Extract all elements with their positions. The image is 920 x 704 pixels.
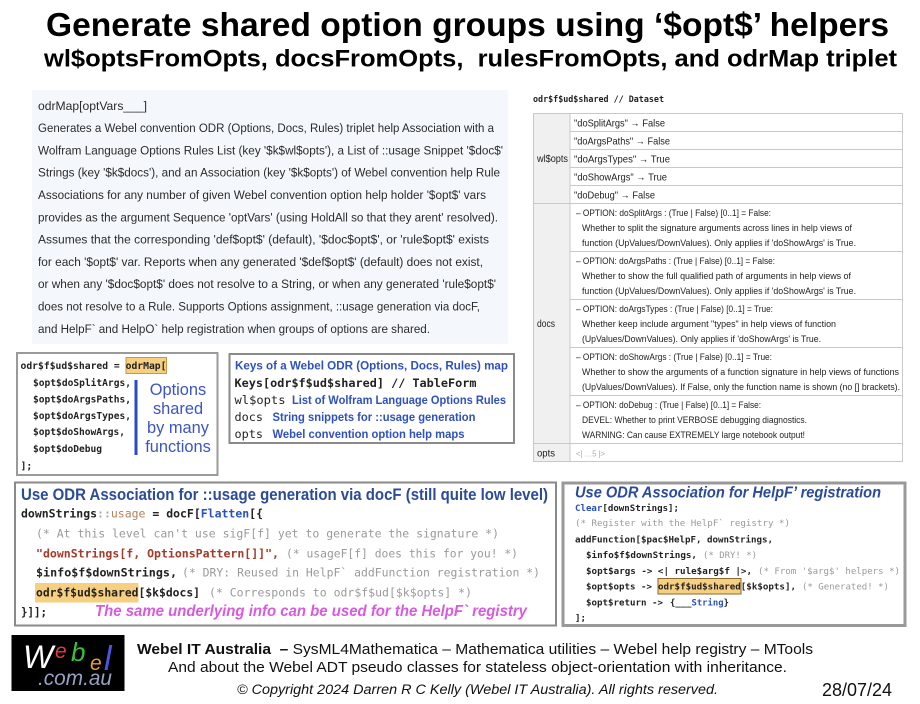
- wl$opts rows: "doArgsTypes" → True: [574, 154, 670, 166]
- code: (* DRY: Reused in HelpF` addFunction registration *): [182, 566, 540, 580]
- docs rows: – OPTION: doDebug : (True | False) [0..1] = False:: [576, 399, 761, 410]
- panel: keys of ODR map: Keys of a Webel ODR (Options, Docs, Rules) map: [235, 358, 508, 372]
- wl$opts rows: "doArgsPaths" → False: [574, 136, 670, 148]
- docs rows: Whether to split the signature arguments across lines in help views of: [582, 222, 852, 233]
- panel: keys of ODR map: docs: [234, 410, 263, 424]
- logo: Webel: e: [55, 640, 67, 663]
- docs rows: function (UpValues/DownValues). Only applies if 'doShowArgs' is True.: [582, 285, 856, 296]
- footer text: © Copyright 2024 Darren R C Kelly (Webel IT Australia). All rights reserved.: [237, 682, 718, 697]
- callout: options shared: functions: [145, 438, 211, 456]
- heading: Use ODR Association for ::usage generation via docF (still quite low level): [21, 485, 548, 504]
- row labels: wl$opts: [536, 154, 568, 165]
- docs rows: (UpValues/DownValues). Only applies if 'doShowArgs' is True.: [582, 333, 821, 344]
- panel: odrMap code: $opt$doArgsPaths,: [33, 394, 131, 406]
- code: (* Register with the HelpF` registry *): [575, 518, 790, 529]
- panel: odrMap description: provides as the argument Sequence 'optVars' (using HoldAll so that they arent' resolved).: [38, 210, 498, 224]
- code: (* At this level can't use sigF[f] yet to generate the signature *): [36, 526, 499, 540]
- logo: Webel: W: [23, 639, 56, 675]
- highlight: shared: [658, 578, 741, 594]
- code: $info$f$downStrings,: [586, 550, 697, 561]
- footer text: [137, 642, 813, 697]
- code: Clear[downStrings];: [575, 503, 679, 514]
- highlight: odrMap: [126, 358, 166, 374]
- docs rows: – OPTION: doArgsTypes : (True | False) [0..1] = True:: [576, 303, 773, 314]
- code: {___String}: [670, 598, 729, 608]
- docs rows: function (UpValues/DownValues). Only applies if 'doShowArgs' is True.: [582, 237, 856, 248]
- code: downStrings::usage = docF[Flatten[{: [21, 506, 263, 520]
- panel: odrMap description: Associations for any number of given Webel convention option help holder '$opt$' vars: [38, 188, 486, 202]
- docs rows: [576, 207, 900, 440]
- logo: Webel: l: [104, 640, 113, 678]
- docs rows: Whether to show the full qualified path of arguments in help views of: [582, 270, 851, 281]
- opts row: <| …5 |>: [576, 448, 605, 458]
- subtitle: wl$optsFromOpts, docsFromOpts, rulesFromOpts, and odrMap triplet: [43, 46, 897, 72]
- callout: same info: The same underlying info can be used for the HelpF` registry: [95, 603, 528, 620]
- code: [575, 503, 900, 624]
- dataset heading: odr$f$ud$shared // Dataset: [533, 94, 664, 104]
- code: odr$f$ud$shared[$k$opts],: [658, 582, 796, 592]
- code: $opt$args -> <| rule$arg$f |>,: [586, 566, 752, 577]
- callout: options shared: shared: [153, 400, 203, 418]
- footer text: Webel IT Australia – SysML4Mathematica – Mathematica utilities – Webel help registry – MTools: [137, 642, 813, 658]
- code: addFunction[$pac$HelpF, downStrings,: [575, 534, 773, 546]
- code: (* usageF[f] does this for you! *): [286, 546, 518, 560]
- docs rows: – OPTION: doShowArgs : (True | False) [0..1] = True:: [576, 351, 772, 362]
- wl$opts rows: "doShowArgs" → True: [574, 172, 667, 184]
- highlight: shared: [35, 583, 138, 602]
- panel: keys of ODR map: wl$opts: [234, 393, 286, 407]
- docs rows: Whether to show the arguments of a function signature in help views of functions: [582, 366, 899, 377]
- code: [21, 506, 540, 619]
- panel: odrMap description: for each '$opt$' var. Reports when any generated '$def$opt$' (default) does not exist,: [38, 255, 483, 269]
- panel: odrMap code: $opt$doDebug: [33, 444, 102, 455]
- panel: odrMap description: Strings (key '$k$docs'), and an Association (key '$k$opts') of Webel convention help Rule: [38, 166, 500, 180]
- code: ];: [575, 613, 586, 624]
- row labels: opts: [537, 448, 555, 460]
- code: (* From '$arg$' helpers *): [758, 566, 900, 577]
- panel: odrMap description: Wolfram Language Options Rules List (key '$k$wl$opts'), a List of ::usage Snippet '$doc$': [38, 143, 503, 157]
- code: (* Corresponds to odr$f$ud[$k$opts] *): [209, 586, 472, 600]
- docs rows: DEVEL: Whether to print VERBOSE debugging diagnostics.: [582, 414, 807, 425]
- logo: Webel: [12, 635, 124, 691]
- panel: odrMap description: Assumes that the corresponding 'def$opt$' (default), '$doc$opt$', or 'rule$opt$' exists: [38, 233, 489, 247]
- logo: Webel: b: [71, 637, 85, 667]
- docs rows: – OPTION: doSplitArgs : (True | False) [0..1] = False:: [576, 207, 771, 218]
- panel: dataset table: [534, 114, 902, 462]
- panel: keys of ODR map: String snippets for ::usage generation: [272, 410, 476, 424]
- code: (* DRY! *): [703, 550, 757, 561]
- wl$opts rows: "doDebug" → False: [574, 190, 655, 202]
- docs rows: (UpValues/DownValues). If False, only the function name is shown (no [] brackets).: [582, 381, 900, 392]
- callout: options shared: by many: [147, 419, 210, 437]
- title: Generate shared option groups using ‘$opt$’ helpers: [46, 6, 889, 43]
- wl$opts rows: "doSplitArgs" → False: [574, 118, 665, 130]
- panel: keys of ODR map: opts: [234, 427, 263, 441]
- panel: keys of ODR map: [230, 354, 514, 443]
- docs rows: – OPTION: doArgsPaths : (True | False) [0..1] = False:: [576, 255, 775, 266]
- panel: odrMap code: [17, 353, 218, 475]
- code: "downStrings[f, OptionsPattern[]]",: [36, 546, 279, 560]
- logo: Webel: .com.au: [38, 667, 112, 690]
- footer text: And about the Webel ADT pseudo classes for stateless object-orientation with inheritance.: [168, 659, 787, 676]
- code: odr$f$ud$shared[$k$docs]: [36, 586, 200, 600]
- docs rows: WARNING: Can cause EXTREMELY large notebook output!: [582, 429, 805, 440]
- docs rows: Whether keep include argument "types" in help views of function: [582, 318, 836, 329]
- panel: odrMap code: $opt$doArgsTypes,: [33, 411, 131, 422]
- panel: usage generation via docF: [15, 482, 556, 626]
- panel: odrMap description: or when any '$doc$opt$' does not resolve to a String, or when any generated 'rule$opt$': [38, 277, 496, 291]
- row labels: [536, 154, 568, 460]
- panel: HelpF registration: [563, 483, 905, 626]
- logo: Webel: e: [90, 652, 102, 675]
- panel: odrMap code: $opt$doSplitArgs,: [33, 377, 131, 389]
- code: }]];: [21, 605, 47, 619]
- row labels: docs: [537, 319, 555, 330]
- panel: odrMap code: ];: [20, 461, 32, 472]
- callout: options shared: Options: [150, 381, 206, 399]
- blue bar: [134, 380, 138, 455]
- callout: options shared: [145, 381, 211, 456]
- code: $opt$opts ->: [586, 582, 652, 592]
- code: $info$f$downStrings,: [36, 566, 177, 580]
- panel: odrMap description: odrMap[optVars___]: [38, 99, 147, 113]
- panel: odrMap description: [32, 90, 508, 344]
- panel: odrMap description: does not resolve to a Rule. Supports Options assignment, ::usage generation via docF,: [38, 300, 480, 314]
- code: (* Generated! *): [802, 582, 889, 592]
- panel: odrMap code: $opt$doShowArgs,: [33, 427, 125, 438]
- panel: keys of ODR map: List of Wolfram Language Options Rules: [292, 393, 506, 407]
- heading: Use ODR Association for HelpF’ registration: [575, 484, 881, 502]
- panel: odrMap description: Generates a Webel convention ODR (Options, Docs, Rules) triplet help Association with a: [38, 121, 494, 135]
- panel: keys of ODR map: Webel convention option help maps: [272, 427, 465, 441]
- panel: odrMap code: odr$f$ud$shared = odrMap[: [20, 361, 166, 372]
- code: $opt$return ->: [586, 598, 663, 608]
- panel: keys of ODR map: Keys[odr$f$ud$shared] // TableForm: [234, 376, 476, 390]
- wl$opts rows: [574, 118, 670, 202]
- panel: odrMap description: and HelpF` and HelpO` help registration when groups of options are shared.: [38, 322, 430, 336]
- date: 28/07/24: [822, 680, 892, 700]
